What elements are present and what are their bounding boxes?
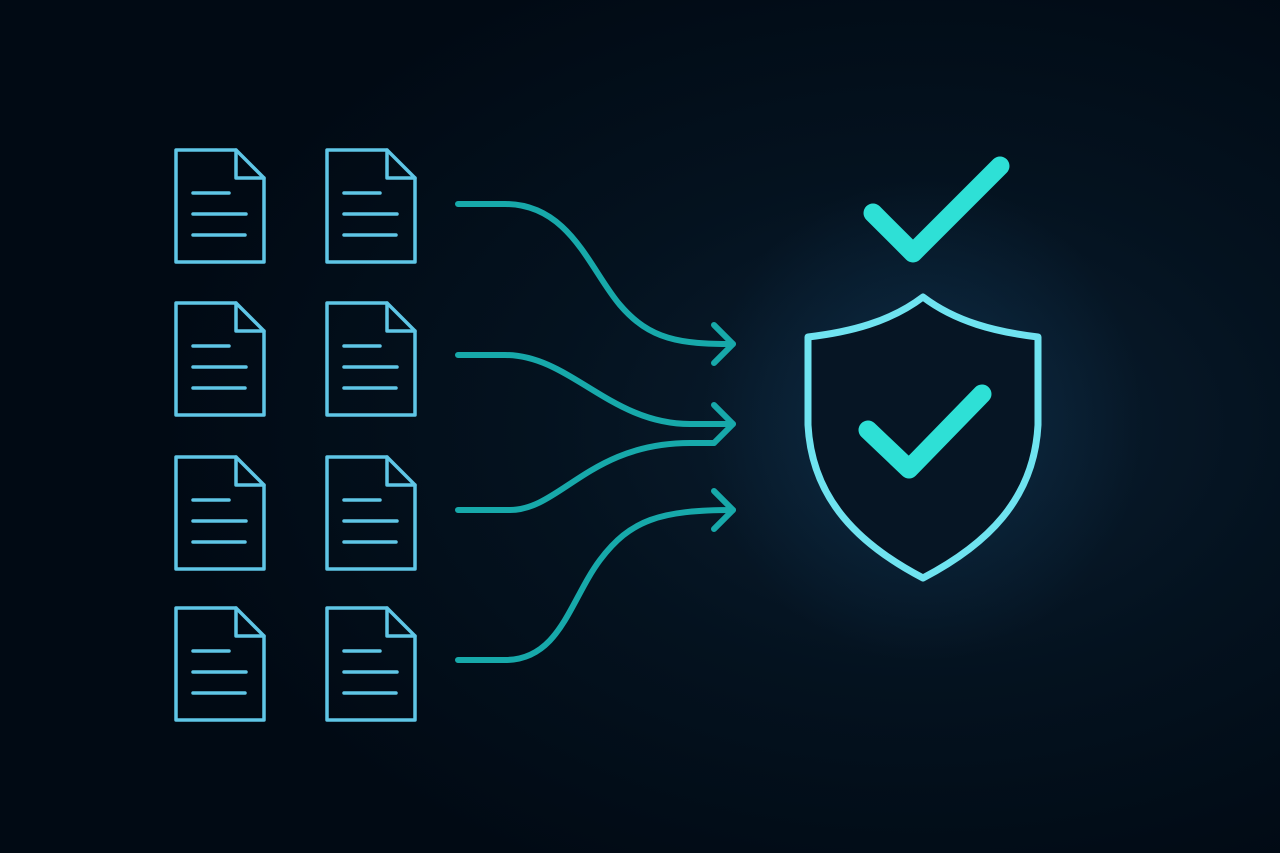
icon: shield with check — [808, 297, 1038, 578]
arrows — [458, 204, 733, 660]
icon: top checkmark — [873, 166, 1000, 253]
documents grid — [176, 150, 415, 720]
